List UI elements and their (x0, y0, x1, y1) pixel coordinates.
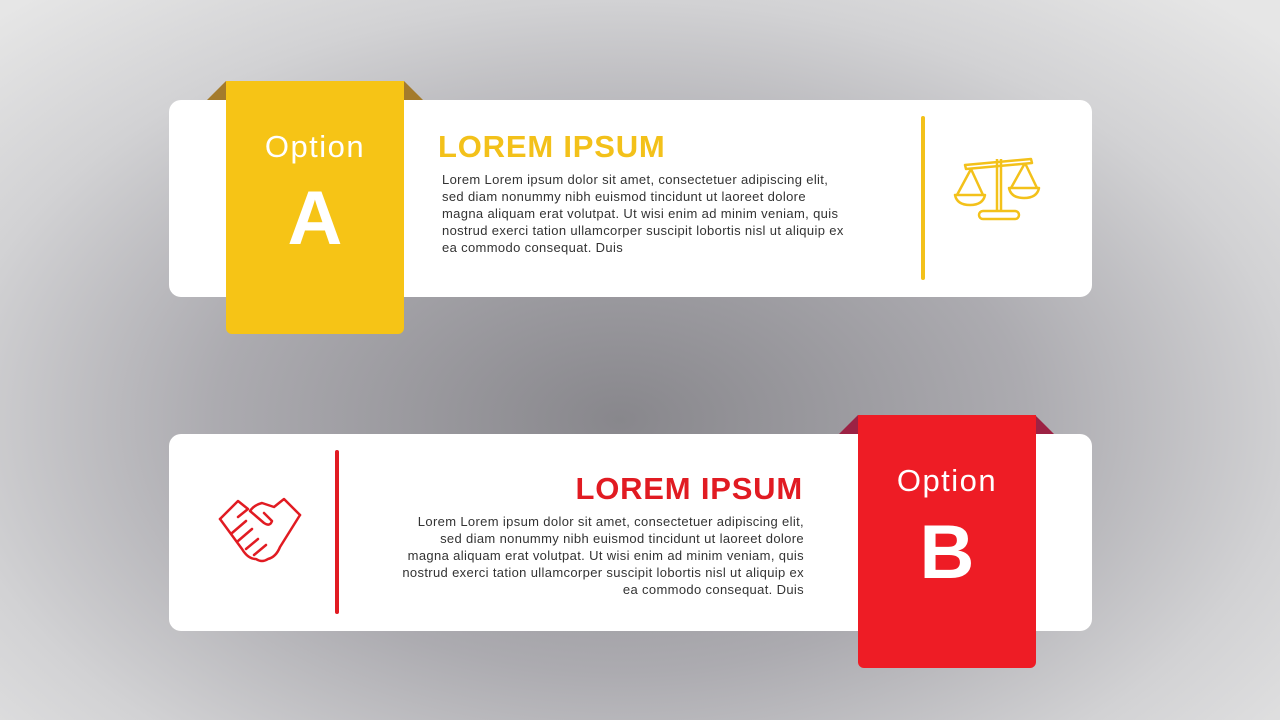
fold left B (839, 415, 858, 434)
fold right A (404, 81, 423, 100)
body B: sed diam nonummy nibh euismod tincidunt ut laoreet dolore (440, 531, 804, 546)
tab B (858, 415, 1036, 668)
heading A: LOREM IPSUM (438, 129, 666, 164)
body A: sed diam nonummy nibh euismod tincidunt ut laoreet dolore (442, 189, 806, 204)
body A (442, 172, 844, 255)
heading B: LOREM IPSUM (575, 471, 803, 506)
tab A (226, 81, 404, 334)
tab B: B (920, 510, 974, 595)
card A (169, 100, 1092, 297)
icon: scales (954, 158, 1040, 220)
body B: magna aliquam erat volutpat. Ut wisi enim ad minim veniam, quis (408, 548, 804, 563)
panel: option B (169, 415, 1092, 668)
tab A: A (288, 176, 342, 261)
body B (402, 514, 804, 597)
card B (169, 434, 1092, 631)
icon: handshake (218, 498, 302, 562)
body B: ea commodo consequat. Duis (623, 582, 804, 597)
body B: Lorem Lorem ipsum dolor sit amet, consectetuer adipiscing elit, (418, 514, 804, 529)
body A: Lorem Lorem ipsum dolor sit amet, consectetuer adipiscing elit, (442, 172, 828, 187)
divider A (921, 116, 925, 280)
fold right B (1036, 416, 1054, 434)
panel: option A (169, 81, 1092, 334)
body A: magna aliquam erat volutpat. Ut wisi enim ad minim veniam, quis (442, 206, 838, 221)
divider B (335, 450, 339, 614)
body A: nostrud exerci tation ullamcorper suscipit lobortis nisl ut aliquip ex (442, 223, 844, 238)
fold left A (207, 81, 226, 100)
body A: ea commodo consequat. Duis (442, 240, 623, 255)
tab A: Option (265, 129, 365, 164)
tab B: Option (897, 463, 997, 498)
body B: nostrud exerci tation ullamcorper suscipit lobortis nisl ut aliquip ex (402, 565, 804, 580)
